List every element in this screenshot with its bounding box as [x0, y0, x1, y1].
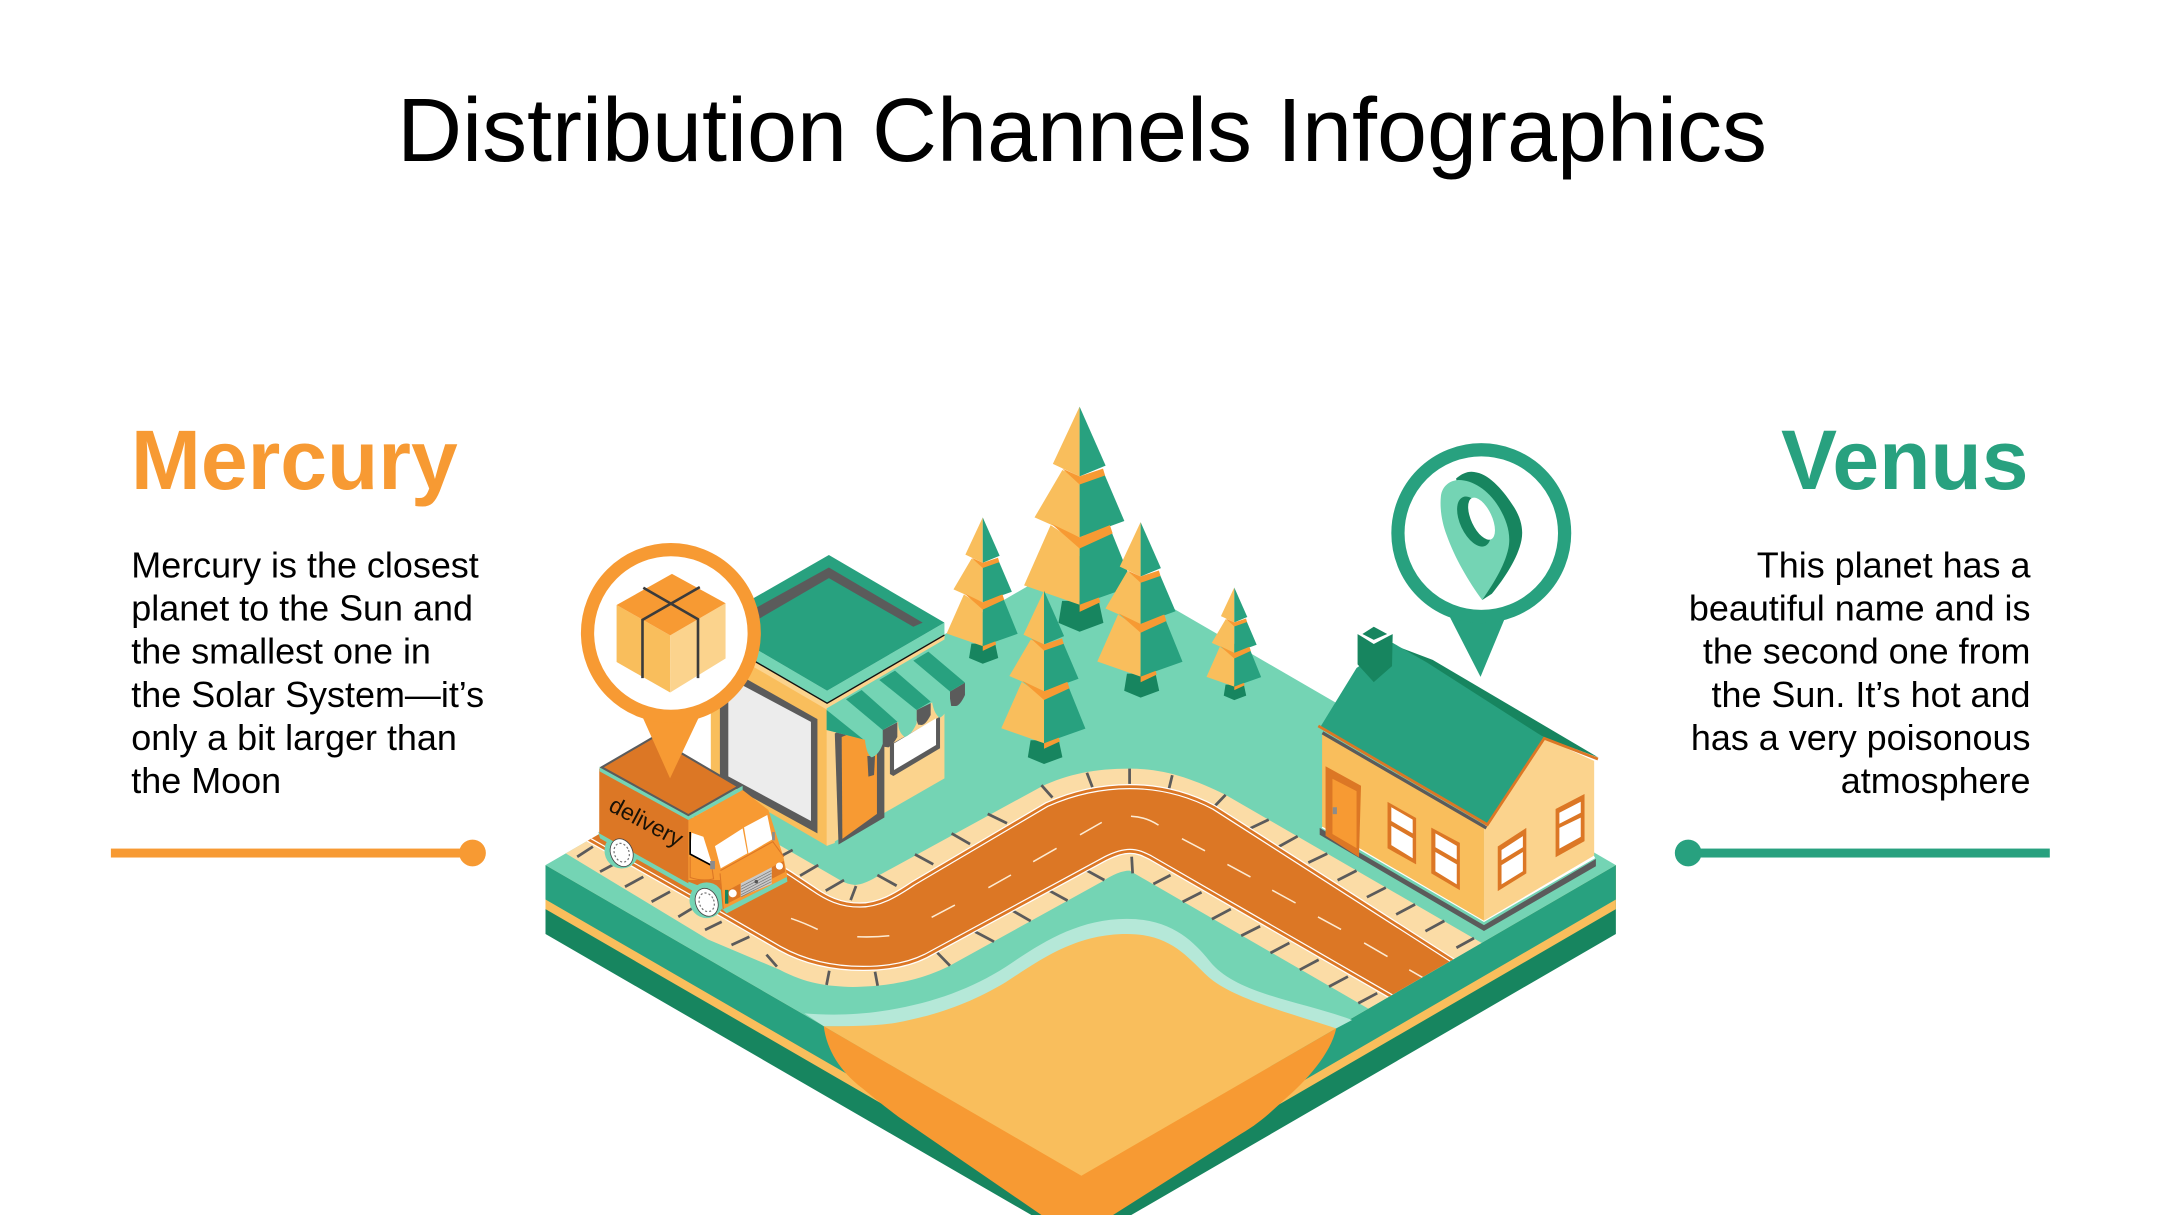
house [1318, 625, 1598, 931]
truck sill and fenders [598, 832, 787, 918]
text block: Venus description: beautiful name and is [1689, 588, 2031, 629]
text block: Mercury description: planet to the Sun and [131, 588, 473, 629]
sidewalk band [566, 768, 1482, 1009]
house door [1326, 766, 1361, 857]
icon: 3D map marker [1441, 472, 1522, 600]
heading: Venus: Venus [1781, 413, 2028, 507]
marker line: Mercury [111, 840, 486, 866]
text block: Mercury description: only a bit larger than [131, 717, 457, 758]
text block: Venus description: the Sun. It’s hot and [1711, 674, 2031, 715]
shop roof [711, 555, 945, 709]
truck cargo box [599, 768, 688, 883]
road edge inner line [588, 785, 1454, 997]
beach and sand [804, 919, 1352, 1215]
text block: Venus description [1689, 544, 2031, 801]
title: Distribution Channels Infographics [397, 81, 1767, 181]
road and sidewalks [566, 768, 1482, 1009]
text block: Mercury description: Mercury is the closest [131, 544, 479, 585]
text block: Mercury description: the Moon [131, 760, 281, 801]
location pin: package [588, 550, 754, 778]
tree: small right [1207, 588, 1261, 700]
house roof [1318, 643, 1598, 828]
house walls [1322, 734, 1594, 921]
shop side window [890, 717, 940, 776]
truck side window [690, 832, 712, 866]
text block: Mercury description: the smallest one in [131, 631, 431, 672]
trees [947, 407, 1261, 764]
tree: large back [1024, 407, 1133, 632]
shop display window [720, 664, 817, 833]
road surface [586, 784, 1454, 998]
text block: Venus description: This planet has a [1757, 544, 2031, 585]
text block: Venus description: has a very poisonous [1691, 717, 2031, 758]
tree: right medium [1097, 522, 1183, 698]
shop door [835, 709, 884, 844]
truck cab [688, 790, 787, 909]
house chimney [1358, 625, 1393, 682]
base: layered ground block [546, 555, 1616, 1215]
isometric illustration [537, 407, 1616, 1215]
delivery truck [598, 737, 787, 920]
truck windshield [715, 815, 772, 868]
text block: Venus description: the second one from [1703, 631, 2031, 672]
house windows [1388, 794, 1585, 891]
truck grille and lights [725, 861, 785, 904]
tree: front medium [1001, 591, 1085, 764]
text block: Mercury description: the Solar System—it’s [131, 674, 484, 715]
shop building [711, 555, 965, 846]
shop awning [827, 639, 965, 777]
location pin: map marker [1398, 450, 1565, 677]
house foundation [1320, 827, 1596, 931]
tree: left back [947, 517, 1018, 664]
text block: Venus description: atmosphere [1841, 760, 2031, 801]
truck wheels [606, 835, 722, 920]
icon: parcel box [617, 574, 726, 692]
panel: Mercury [111, 413, 486, 866]
heading: Mercury: Mercury [131, 413, 458, 507]
sidewalk ticks [577, 769, 1474, 1003]
truck lettering: delivery [605, 791, 688, 852]
panel: Venus [1675, 413, 2050, 866]
road centre dashes [791, 816, 1424, 978]
text block: Mercury description [131, 544, 484, 801]
truck roof [600, 737, 743, 820]
marker line: Venus [1675, 840, 2050, 866]
